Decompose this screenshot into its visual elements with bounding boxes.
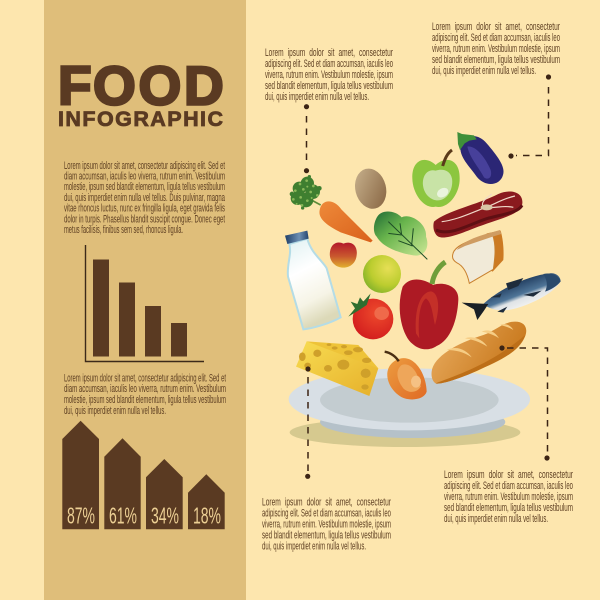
- food illustrations: lower group: [296, 322, 526, 399]
- icon: fish: [462, 273, 561, 320]
- text block: bottom right: [444, 469, 573, 525]
- text block: bottom left: viverra, rutrum enim. Vestibulum molestie, ipsum: [262, 518, 391, 530]
- text block: bottom left: adipiscing elit. Sed et diam accumsan, iaculis leo: [262, 507, 391, 519]
- text block: top centre: Lorem ipsum dolor sit amet, consectetur: [265, 47, 393, 59]
- icon: carrot: [290, 175, 373, 242]
- arrow bar: 61%: [104, 438, 141, 529]
- arrow bar: 61%: 61%: [109, 502, 137, 528]
- connector: cheese to bottom left: [305, 366, 311, 479]
- icon: yellow-green fruit: [363, 255, 401, 293]
- panel: left sidebar: [44, 0, 246, 600]
- connector: baguette to bottom right: [499, 345, 550, 461]
- icon: cheese wedge: [296, 341, 378, 396]
- text block: bottom left: dui, quis imperdiet enim nulla vel tellus.: [262, 540, 366, 552]
- icon: tomato: [348, 293, 393, 339]
- text block: bottom left: [262, 496, 391, 552]
- text block: sidebar intro: dolor in turpis. Phasellus blandit suscipit congue. Donec eget: [64, 213, 225, 225]
- icon: peach: [385, 352, 427, 399]
- text block: sidebar intro: molestie, ipsum sed blandit elementum, ligula tellus vestibulum: [64, 181, 225, 193]
- icon: eggplant: [457, 132, 504, 184]
- text block: sidebar middle: dui, quis imperdiet enim nulla vel tellus.: [64, 405, 166, 417]
- text block: sidebar intro: dui, quis imperdiet enim nulla vel tellus. Duis pulvinar, magna: [64, 192, 225, 204]
- bar chart: [86, 245, 204, 362]
- icon: bread: [452, 230, 504, 283]
- text block: top centre: dui, quis imperdiet enim nulla vel tellus.: [265, 91, 369, 103]
- arrow bar: 87%: [62, 421, 99, 529]
- text block: top centre: adipiscing elit. Sed et diam accumsan, iaculis leo: [265, 58, 393, 70]
- icon: red pepper: [400, 262, 458, 349]
- food illustrations: upper group: [285, 132, 561, 349]
- text block: bottom left: sed blandit elementum, ligula tellus vestibulum: [262, 529, 391, 541]
- arrow bar: 34%: 34%: [151, 502, 179, 528]
- text block: sidebar middle: molestie, ipsum sed blandit elementum, ligula tellus vestibulum: [64, 394, 226, 406]
- text block: sidebar intro: diam accumsan, iaculis leo viverra, rutrum enim. Vestibulum: [64, 170, 225, 182]
- arrow bar chart with percentages: [62, 421, 225, 529]
- text block: bottom left: Lorem ipsum dolor sit amet, consectetur: [262, 496, 391, 508]
- text block: sidebar intro: Lorem ipsum dolor sit amet, consectetur adipiscing elit. Sed et: [64, 160, 225, 172]
- text block: top right: [432, 21, 560, 77]
- arrow bar: 18%: 18%: [193, 502, 221, 528]
- icon: baguette: [432, 322, 526, 384]
- icon: green apple: [412, 150, 460, 207]
- arrow bar: 34%: [146, 459, 183, 529]
- icon: meat steak: [433, 192, 522, 238]
- arrow bar: 18%: [188, 474, 225, 529]
- connector: top right to eggplant: [508, 74, 551, 159]
- text block: top centre: viverra, rutrum enim. Vestibulum molestie, ipsum: [265, 69, 393, 81]
- text block: sidebar intro: [64, 160, 225, 236]
- text block: top centre: [265, 47, 393, 103]
- text block: sidebar intro: metus facilisis, finibus sem sed, rhoncus ligula.: [64, 224, 183, 236]
- text block: top centre: sed blandit elementum, ligula tellus vestibulum: [265, 80, 393, 92]
- text block: sidebar middle: [64, 372, 226, 417]
- icon: milk bottle: [285, 231, 341, 329]
- text block: sidebar intro: vitae rhoncus luctus, nunc ex fringilla ligula, eget gravida felis: [64, 203, 225, 215]
- arrow bar: 87%: 87%: [67, 502, 95, 528]
- text block: sidebar middle: Lorem ipsum dolor sit amet, consectetur adipiscing elit. Sed et: [64, 372, 226, 384]
- title: FOOD: [58, 55, 224, 117]
- text block: sidebar middle: diam accumsan, iaculis leo viverra, rutrum enim. Vestibulum: [64, 383, 226, 395]
- icon: potato: [351, 165, 390, 212]
- title: INFOGRAPHIC: [58, 107, 223, 131]
- icon: small red apple: [330, 243, 357, 268]
- connector: top centre: [304, 104, 309, 173]
- icon: lettuce leaf: [374, 211, 427, 259]
- plate: [289, 368, 530, 447]
